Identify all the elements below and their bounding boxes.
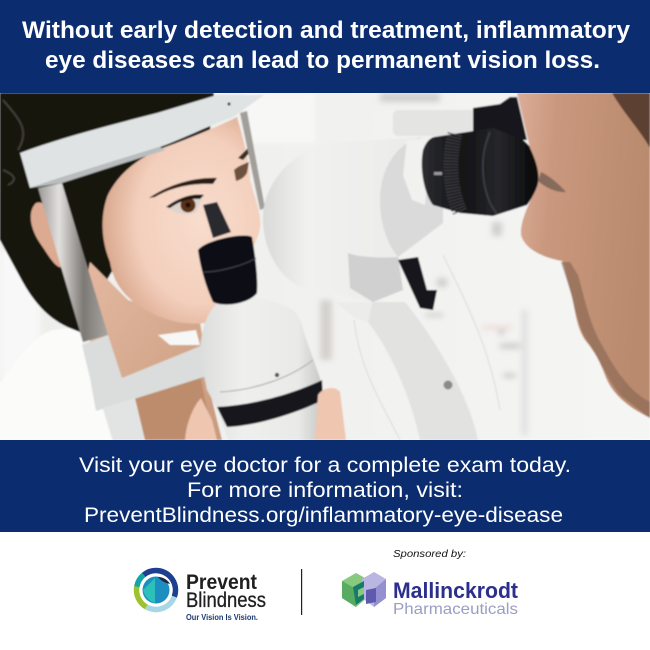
headrest upper band [20, 95, 264, 188]
logo wordmark: Blindness [186, 589, 266, 612]
woman's ear [31, 202, 65, 267]
instrument stand [368, 302, 478, 440]
logo wordmark [186, 571, 266, 612]
headrest rod left [38, 183, 108, 342]
woman's eye [166, 195, 204, 214]
woman's shirt [0, 327, 112, 440]
logo: Prevent Blindness [129, 563, 266, 622]
far eyebrow [238, 148, 250, 161]
black knob [198, 202, 257, 305]
icon: cube cluster [342, 572, 386, 607]
divider [301, 569, 302, 615]
logo tagline: Our Vision Is Vision. [186, 612, 258, 622]
woman's eyebrow [149, 178, 217, 198]
logo wordmark: Prevent [186, 571, 257, 594]
far eye [234, 162, 249, 181]
photo background [0, 93, 650, 440]
rear white tube [393, 110, 478, 136]
woman's face [103, 117, 260, 324]
photo: eye exam with slit lamp [0, 93, 650, 440]
man's eye [538, 172, 566, 192]
logo subtitle: Pharmaceuticals [393, 601, 518, 618]
large slit lamp housing [263, 137, 443, 302]
top banner [0, 0, 650, 93]
man's hair [612, 93, 650, 148]
call to action text: Visit your eye doctor for a complete exam today. [79, 454, 571, 477]
man's face [517, 93, 650, 418]
banner heading: Without early detection and treatment, inflammatory [22, 17, 631, 44]
banner heading [22, 17, 631, 74]
call to action text [79, 454, 571, 527]
sponsored by label: Sponsored by: [393, 548, 466, 560]
chart hairlines [354, 255, 500, 440]
woman's neck [82, 262, 222, 440]
call to action text: PreventBlindness.org/inflammatory-eye-disease [84, 504, 563, 527]
blurred window and wall shading [2, 252, 334, 376]
headrest screw [228, 102, 230, 106]
call to action text: For more information, visit: [187, 479, 463, 502]
grey crescent of housing [380, 137, 443, 257]
white eyepiece collar [403, 138, 427, 205]
headrest rod right [240, 111, 265, 210]
hand right fingers [315, 388, 346, 440]
man's stubble [561, 262, 650, 418]
hand left fingers [185, 398, 217, 440]
banner heading: eye diseases can lead to permanent vision loss. [45, 47, 600, 74]
call to action banner [0, 440, 650, 532]
hair [0, 93, 214, 332]
rear eyepiece [473, 97, 527, 140]
icon: eye ring [129, 563, 183, 617]
logo: Mallinckrodt Pharmaceuticals [342, 572, 519, 618]
blurred eye chart [380, 93, 527, 435]
band shadow [30, 147, 165, 188]
highlight strands in hair [3, 100, 23, 185]
small white instrument body [200, 298, 323, 440]
dark neck under chin rest [136, 378, 207, 440]
logo wordmark: Mallinckrodt [393, 578, 519, 603]
black joystick handle [398, 257, 437, 310]
chin rest collar and bar [82, 330, 207, 440]
lower shaded housing [348, 253, 403, 302]
front eyepiece [422, 128, 540, 216]
